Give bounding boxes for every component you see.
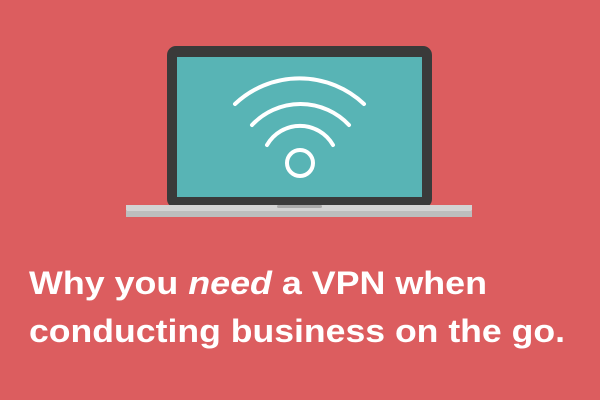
laptop screen <box>177 57 422 197</box>
title: Why you need a VPN when <box>29 265 487 301</box>
laptop base <box>126 205 472 217</box>
title <box>29 265 565 349</box>
laptop notch <box>277 205 322 208</box>
icon: wifi <box>235 78 364 176</box>
laptop lid <box>167 46 432 208</box>
title: conducting business on the go. <box>29 313 565 349</box>
icon: laptop <box>126 46 472 217</box>
